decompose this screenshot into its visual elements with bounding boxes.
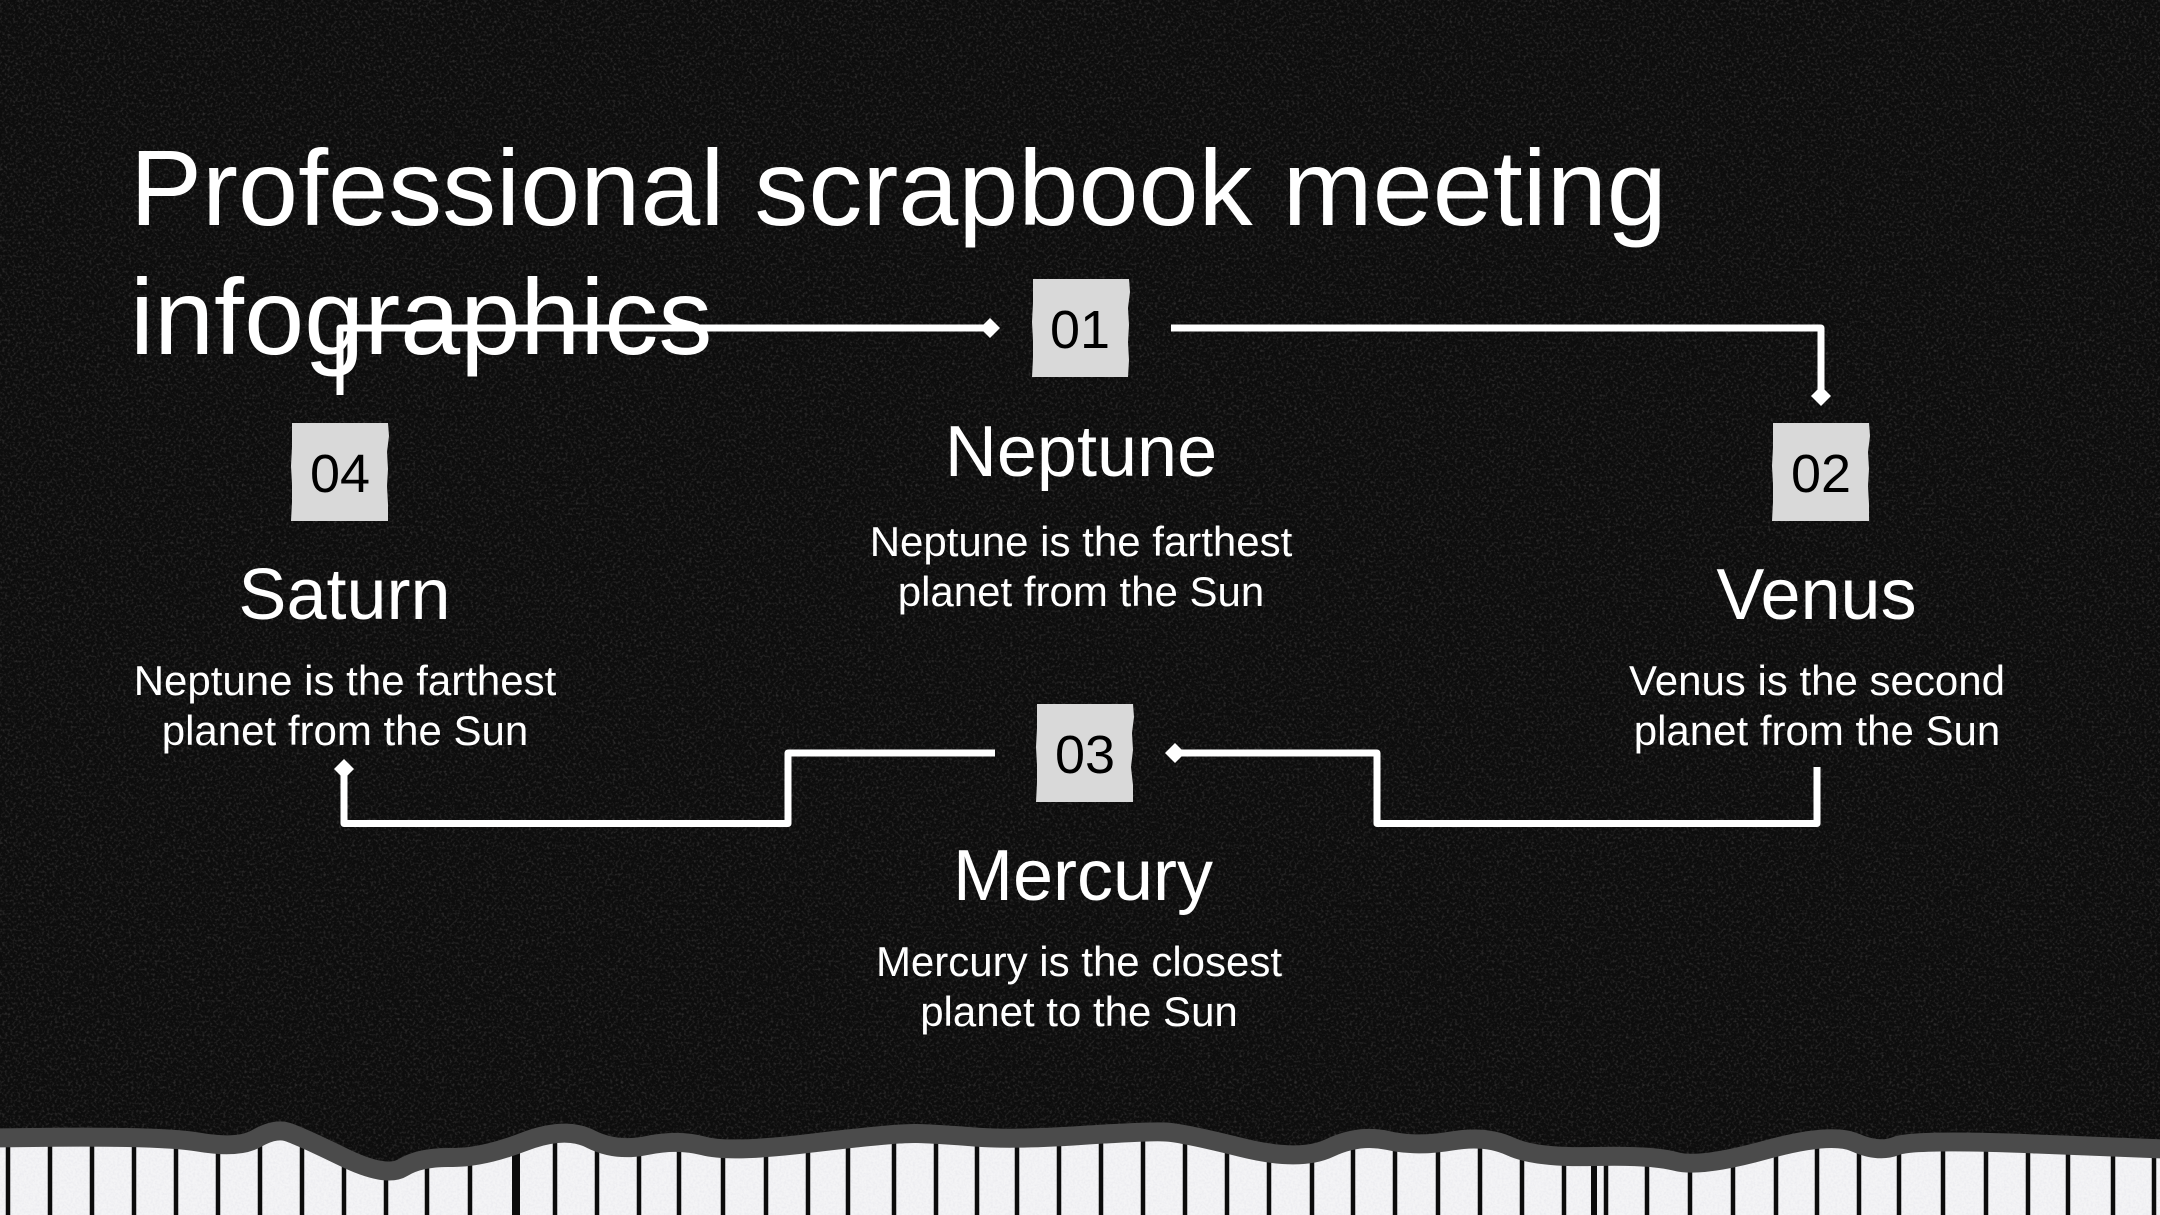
description Neptune: Neptune is the farthest (870, 518, 1293, 565)
description Saturn (134, 657, 557, 754)
panel: 01 Neptune (870, 279, 1293, 615)
number badge 04: 04 (310, 444, 370, 504)
description Saturn: Neptune is the farthest (134, 657, 557, 704)
heading Saturn: Saturn (238, 555, 451, 635)
heading Venus: Venus (1716, 555, 1917, 635)
number badge 01: 01 (1050, 300, 1110, 360)
number badge 02: 02 (1791, 444, 1851, 504)
panel: 04 Saturn (134, 423, 557, 754)
number badge 03 (1036, 704, 1134, 802)
description Venus (1629, 657, 2005, 754)
arrow: 01 to 02 (1171, 328, 1831, 406)
number badge 01 (1032, 279, 1130, 377)
description Mercury: Mercury is the closest (876, 938, 1282, 985)
description Neptune: planet from the Sun (898, 568, 1264, 615)
title (130, 127, 1667, 377)
number badge 02 (1772, 423, 1870, 521)
arrow: 03 to 04 (334, 753, 995, 824)
heading Neptune: Neptune (945, 412, 1217, 492)
heading Mercury: Mercury (953, 836, 1213, 916)
title: infographics (130, 256, 712, 377)
description Mercury (876, 938, 1282, 1035)
arrow: 02 to 03 (1165, 743, 1817, 824)
description Venus: Venus is the second (1629, 657, 2005, 704)
description Saturn: planet from the Sun (162, 707, 528, 754)
description Venus: planet from the Sun (1634, 707, 2000, 754)
panel: 03 Mercury (876, 704, 1282, 1035)
arrow: 01 to 04 (340, 318, 1000, 395)
number badge 04 (291, 423, 389, 521)
description Mercury: planet to the Sun (920, 988, 1238, 1035)
panel: 02 Venus (1629, 423, 2005, 754)
torn paper strip with vertical lines (0, 1120, 2160, 1215)
description Neptune (870, 518, 1293, 615)
title: Professional scrapbook meeting (130, 127, 1667, 248)
number badge 03: 03 (1055, 725, 1115, 785)
